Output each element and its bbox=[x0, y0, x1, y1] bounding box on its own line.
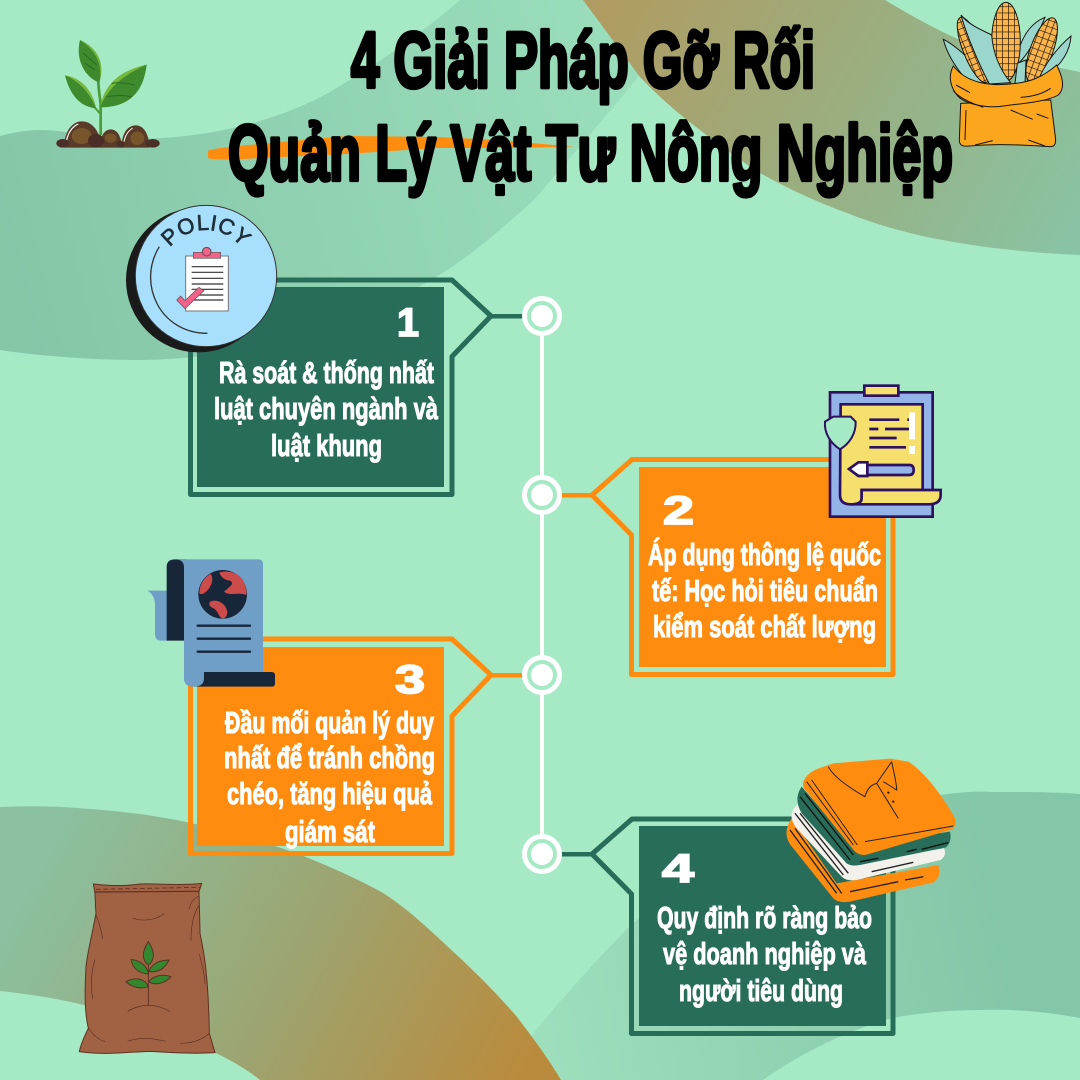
title underline brush stroke bbox=[208, 136, 575, 160]
connector 4 bbox=[560, 852, 592, 856]
icon: sprout in soil bbox=[56, 40, 160, 148]
text 3 bbox=[224, 705, 435, 849]
connector 2 bbox=[560, 493, 592, 498]
panel 1 bbox=[190, 280, 491, 494]
panel 4 bbox=[592, 819, 893, 1034]
text 2: Áp dụng thông lệ quốc bbox=[648, 537, 881, 572]
panel 2 bbox=[592, 460, 893, 674]
text 3: Đầu mối quản lý duy bbox=[225, 705, 435, 740]
text 1: luật chuyên ngành và bbox=[214, 391, 439, 426]
number 1: 1 bbox=[397, 301, 419, 345]
text 4: vệ doanh nghiệp và bbox=[663, 936, 867, 971]
icon: stack of folded shirts bbox=[786, 759, 955, 902]
timeline bbox=[492, 298, 592, 872]
text 4 bbox=[657, 900, 872, 1008]
text 2 bbox=[648, 537, 881, 644]
panel 3 bbox=[190, 639, 491, 854]
text 1: luật khung bbox=[271, 428, 382, 463]
text 4: người tiêu dùng bbox=[679, 973, 843, 1008]
text 2: kiểm soát chất lượng bbox=[653, 609, 876, 644]
text 3: chéo, tăng hiệu quả bbox=[227, 776, 433, 811]
node 2 bbox=[524, 478, 560, 512]
connector 3 bbox=[492, 673, 524, 678]
icon: sack of corn bbox=[943, 2, 1071, 147]
icon: policy badge bbox=[126, 204, 278, 352]
icon: globe document scroll bbox=[147, 559, 275, 687]
text 1 bbox=[214, 355, 439, 463]
number 2: 2 bbox=[663, 489, 694, 533]
icon: policy badge: POLICY bbox=[160, 214, 252, 246]
icon: fertilizer bag bbox=[79, 883, 215, 1053]
node 1 bbox=[524, 298, 560, 334]
number 3: 3 bbox=[395, 658, 425, 702]
text 3: giám sát bbox=[285, 814, 375, 849]
text 3: nhất để tránh chồng bbox=[224, 740, 435, 775]
node 3 bbox=[524, 658, 560, 692]
text 1: Rà soát & thống nhất bbox=[219, 355, 434, 390]
icon: clipboard with shield and pen bbox=[825, 386, 941, 517]
timeline spine bbox=[540, 316, 544, 854]
node 4 bbox=[524, 836, 560, 872]
number 4: 4 bbox=[662, 847, 695, 891]
title: 4 Giải Pháp Gỡ Rối bbox=[351, 15, 815, 104]
text 2: tế: Học hỏi tiêu chuẩn bbox=[652, 573, 878, 608]
connector 1 bbox=[492, 314, 524, 318]
text 4: Quy định rõ ràng bảo bbox=[657, 900, 872, 935]
title bbox=[228, 15, 953, 197]
